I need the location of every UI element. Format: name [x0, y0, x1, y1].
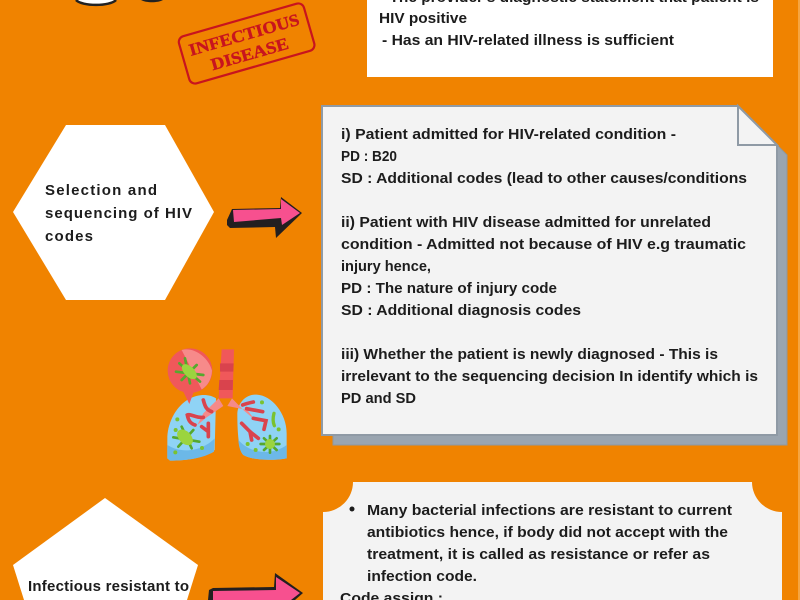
panel: sequencing rules document: ii) Patient with HIV disease admitted for unrelated	[341, 215, 711, 231]
hexagon: selection and sequencing: codes	[45, 228, 93, 245]
pentagon: infectious resistant: Infectious resistant to	[28, 578, 189, 595]
arrow: to resistance panel	[208, 573, 303, 600]
panel: HIV diagnosis statement: - Has an HIV-related illness is sufficient	[382, 33, 674, 49]
panel: sequencing rules document: injury hence,	[341, 259, 431, 275]
stamp: infectious disease	[177, 2, 316, 85]
panel: sequencing rules document: SD : Additional codes (lead to other causes/conditions	[341, 171, 747, 187]
panel: antibiotic resistance: treatment, it is called as resistance or refer as	[367, 547, 710, 563]
panel: sequencing rules document: SD : Additional diagnosis codes	[341, 303, 581, 319]
panel: sequencing rules document: PD and SD	[341, 391, 416, 407]
panel: antibiotic resistance	[323, 482, 782, 600]
icon: cropped glasses at top	[76, 0, 163, 5]
arrow: to sequencing panel	[227, 197, 302, 238]
panel: HIV diagnosis statement	[367, 0, 773, 77]
panel: sequencing rules document: PD : The nature of injury code	[341, 281, 557, 297]
pentagon: infectious resistant	[13, 498, 198, 600]
panel: antibiotic resistance: infection code.	[367, 569, 477, 585]
panel: sequencing rules document: PD : B20	[341, 149, 397, 165]
stamp: infectious disease: DISEASE	[209, 34, 291, 74]
hexagon: selection and sequencing: Selection and	[45, 182, 157, 199]
icon: infected lungs	[167, 348, 287, 461]
panel: antibiotic resistance: antibiotics hence, if body did not accept with the	[367, 525, 728, 541]
panel: sequencing rules document: condition - Admitted not because of HIV e.g traumatic	[341, 237, 746, 253]
hexagon: selection and sequencing	[13, 125, 214, 300]
hexagon: selection and sequencing: sequencing of HIV	[45, 205, 192, 222]
stamp: infectious disease: INFECTIOUS	[187, 10, 302, 60]
panel: antibiotic resistance: Many bacterial infections are resistant to current	[367, 503, 732, 519]
panel: HIV diagnosis statement: HIV positive	[379, 11, 467, 27]
panel: sequencing rules document: irrelevant to the sequencing decision In identify which is	[341, 369, 758, 385]
panel: sequencing rules document: iii) Whether the patient is newly diagnosed - This is	[341, 347, 718, 363]
panel: sequencing rules document: i) Patient admitted for HIV-related condition -	[341, 127, 676, 143]
panel: sequencing rules document	[322, 106, 787, 445]
